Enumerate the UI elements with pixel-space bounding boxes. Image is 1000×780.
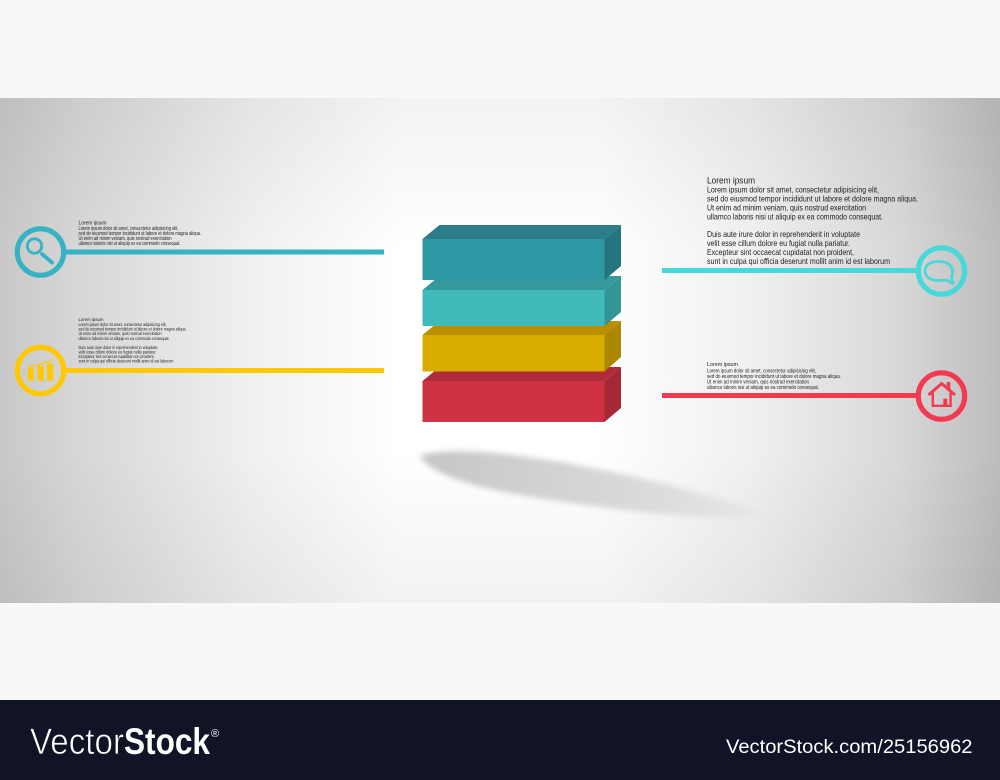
top band: [0, 0, 1000, 98]
connector line: [64, 250, 384, 254]
text block: ullamco laboris nisi ut aliquip ex ea commodo consequat.: [707, 385, 819, 391]
text block: Lorem ipsum dolor sit amet, consectetur adipisicing elit,: [707, 368, 816, 374]
text block: Excepteur sint occaecat cupidatat non proident,: [707, 247, 854, 257]
panel: grey gradient background: [0, 98, 1000, 603]
3D block stack: [422, 225, 621, 422]
text block: Duis aute irure dolor in reprehenderit in voluptate: [707, 229, 860, 239]
text block: Duis aute irure dolor in reprehenderit in voluptate: [78, 345, 158, 350]
footer bar: [0, 700, 1000, 780]
connector line: [662, 393, 918, 398]
text block: [707, 362, 841, 391]
text block: sed do eiusmod tempor incididunt ut labore et dolore magna aliqua.: [707, 374, 841, 380]
connector line: [64, 368, 384, 373]
text block: sunt in culpa qui officia deserunt mollit anim id est laborum: [78, 358, 174, 364]
text block: Excepteur sint occaecat cupidatat non proident,: [78, 354, 154, 359]
callout: cyan speech: [662, 174, 965, 294]
text block: [78, 317, 186, 364]
text block: [78, 221, 201, 247]
icon: bar chart: [17, 347, 64, 394]
bottom light band: [0, 603, 1000, 700]
text block: Lorem ipsum: [707, 174, 755, 185]
connector line: [662, 268, 918, 273]
text block: Lorem ipsum: [78, 317, 104, 323]
callout: blue search: [17, 221, 384, 275]
text block: ullamco laboris nisi ut aliquip ex ea commodo consequat.: [78, 241, 180, 247]
block: teal: [422, 276, 621, 326]
text block: ullamco laboris nisi ut aliquip ex ea commodo consequat.: [78, 336, 170, 341]
callout: red home: [662, 362, 965, 419]
text block: ullamco laboris nisi ut aliquip ex ea commodo consequat.: [707, 211, 883, 221]
text block: Lorem ipsum dolor sit amet, consectetur adipisicing elit,: [707, 185, 879, 195]
text block: [707, 174, 918, 266]
icon: house: [918, 373, 965, 419]
text block: Lorem ipsum: [707, 362, 738, 368]
block: red: [422, 367, 621, 422]
text block: Ut enim ad minim veniam, quis nostrud exercitation: [78, 331, 162, 336]
text block: velit esse cillum dolore eu fugiat nulla pariatur.: [78, 349, 156, 354]
text block: Lorem ipsum: [78, 221, 107, 227]
text block: Ut enim ad minim veniam, quis nostrud exercitation: [78, 236, 172, 242]
footer logo: [30, 721, 210, 762]
block: dark teal: [422, 225, 621, 280]
footer logo: Stock: [124, 721, 210, 762]
text block: Lorem ipsum dolor sit amet, consectetur adipisicing elit,: [78, 322, 166, 327]
text block: Ut enim ad minim veniam, quis nostrud exercitation: [707, 202, 866, 212]
text block: Lorem ipsum dolor sit amet, consectetur adipisicing elit,: [78, 226, 178, 232]
footer logo: Vector: [30, 721, 124, 762]
text block: sed do eiusmod tempor incididunt ut labore et dolore magna aliqua.: [707, 193, 918, 203]
footer image id: VectorStock.com/25156962: [726, 736, 972, 758]
block shadow: [420, 451, 772, 518]
text block: sed do eiusmod tempor incididunt ut labore et dolore magna aliqua.: [78, 231, 201, 237]
icon: speech bubble: [918, 248, 965, 294]
callout: yellow chart: [17, 317, 384, 394]
icon: magnifier: [17, 229, 64, 275]
text block: Ut enim ad minim veniam, quis nostrud exercitation: [707, 379, 809, 385]
text block: sunt in culpa qui officia deserunt mollit anim id est laborum: [707, 256, 890, 266]
text block: velit esse cillum dolore eu fugiat nulla pariatur.: [707, 238, 850, 248]
block: yellow: [422, 321, 621, 372]
registered mark: ®: [211, 728, 219, 740]
text block: sed do eiusmod tempor incididunt ut labore et dolore magna aliqua.: [78, 326, 186, 332]
